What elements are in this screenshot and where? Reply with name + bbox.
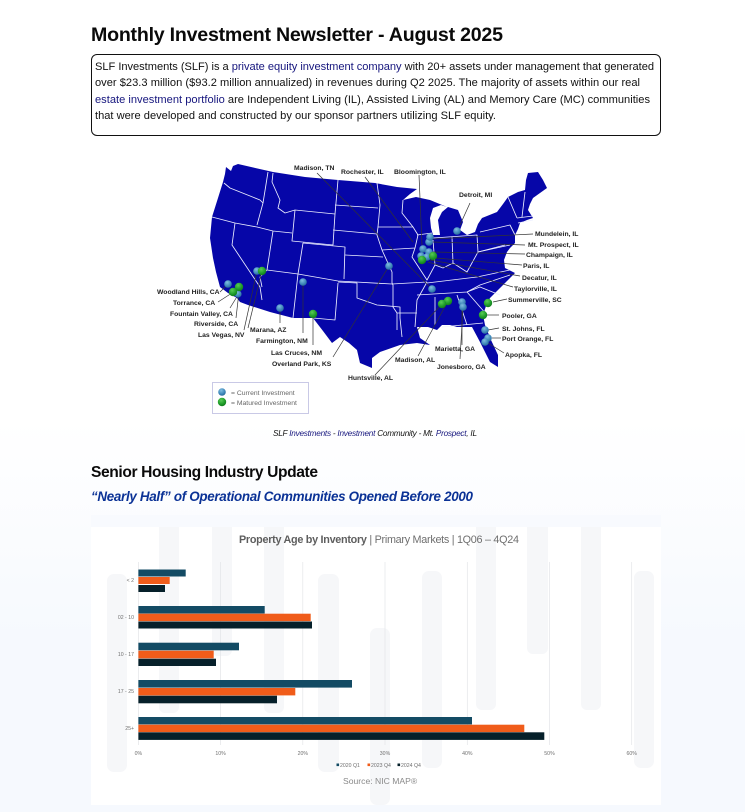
x axis labels: 30% (380, 751, 391, 757)
y axis labels: 02 - 10 (118, 615, 134, 621)
chart title: Property Age by Inventory | Primary Markets | 1Q06 – 4Q24 (239, 534, 519, 546)
map labels: Port Orange, FL (502, 336, 553, 343)
text block: introduction: that were developed and constructed by our sponsor partners utilizing SLF equity. (95, 110, 496, 122)
map labels: St. Johns, FL (502, 326, 545, 333)
x axis labels: 60% (627, 751, 637, 757)
map labels: Torrance, CA (173, 300, 215, 307)
map pins (224, 227, 492, 346)
map labels: Apopka, FL (505, 352, 542, 359)
map labels: Bloomington, IL (394, 169, 446, 176)
x axis labels: 40% (462, 751, 473, 757)
map labels: Paris, IL (523, 263, 549, 270)
heading: senior housing: Senior Housing Industry Update (91, 464, 318, 481)
y axis labels (118, 578, 134, 732)
map labels: Marietta, GA (435, 346, 475, 353)
map labels: Taylorville, IL (514, 286, 557, 293)
map labels: Las Cruces, NM (271, 350, 322, 357)
chart source: Source: NIC MAP® (343, 776, 418, 786)
map caption: SLF Investments - Investment Community - Mt. Prospect, IL (273, 429, 477, 438)
map shape: United States (210, 164, 547, 368)
map labels: Jonesboro, GA (437, 364, 486, 371)
map labels: Detroit, MI (459, 192, 492, 199)
text block: introduction (91, 54, 661, 136)
y axis labels: 25+ (125, 726, 134, 732)
heading: senior housing (91, 464, 474, 504)
top background strip (91, 515, 661, 527)
map labels: Rochester, IL (341, 169, 384, 176)
gridlines (138, 562, 632, 745)
chart legend: 2023 Q4 (371, 763, 391, 769)
map labels: Las Vegas, NV (198, 332, 245, 339)
map labels: Fountain Valley, CA (170, 311, 233, 318)
map labels: Riverside, CA (194, 321, 238, 328)
leader lines (218, 173, 533, 375)
map labels: Huntsville, AL (348, 375, 393, 382)
map labels: Marana, AZ (250, 327, 286, 334)
map labels: Mundelein, IL (535, 231, 578, 238)
x axis labels: 0% (135, 751, 143, 757)
y axis labels: < 2 (127, 578, 134, 584)
bars (138, 570, 544, 740)
map labels: Madison, TN (294, 165, 334, 172)
state borders (212, 172, 533, 337)
map labels: Madison, AL (395, 357, 435, 364)
title: Monthly Investment Newsletter - August 2025 (91, 24, 503, 46)
x axis labels: 10% (215, 751, 226, 757)
map: SLF investment community (157, 164, 579, 438)
map labels (157, 165, 579, 382)
map labels: Woodland Hills, CA (157, 289, 220, 296)
text block: introduction: estate investment portfolio are Independent Living (IL), Assisted Living (AL) and Memory Care (MC) communities (95, 94, 650, 106)
chart legend (336, 763, 421, 769)
map legend: = Current Investment (231, 390, 295, 397)
text block: introduction: SLF Investments (SLF) is a private equity investment company with 20+ assets under management that generated (95, 61, 654, 73)
map labels: Pooler, GA (502, 313, 537, 320)
chart legend: 2024 Q4 (401, 763, 421, 769)
map legend: = Matured Investment (231, 400, 297, 407)
x axis labels: 20% (298, 751, 308, 757)
y axis labels: 10 - 17 (118, 652, 134, 658)
map labels: Decatur, IL (522, 275, 557, 282)
map legend (212, 382, 308, 414)
x axis labels (135, 751, 637, 757)
map labels: Farmington, NM (256, 338, 308, 345)
map labels: Mt. Prospect, IL (528, 242, 579, 249)
y axis labels: 17 - 25 (118, 689, 134, 695)
map labels: Summerville, SC (508, 297, 562, 304)
text block: introduction: over $23.3 million ($93.2 million annualized) in revenues during Q2 2025. The majority of assets within our real (95, 77, 640, 89)
heading: senior housing: “Nearly Half” of Operational Communities Opened Before 2000 (91, 489, 474, 504)
chart legend: 2020 Q1 (340, 763, 360, 769)
map labels: Champaign, IL (526, 252, 573, 259)
map labels: Overland Park, KS (272, 361, 332, 368)
x axis labels: 50% (544, 751, 555, 757)
